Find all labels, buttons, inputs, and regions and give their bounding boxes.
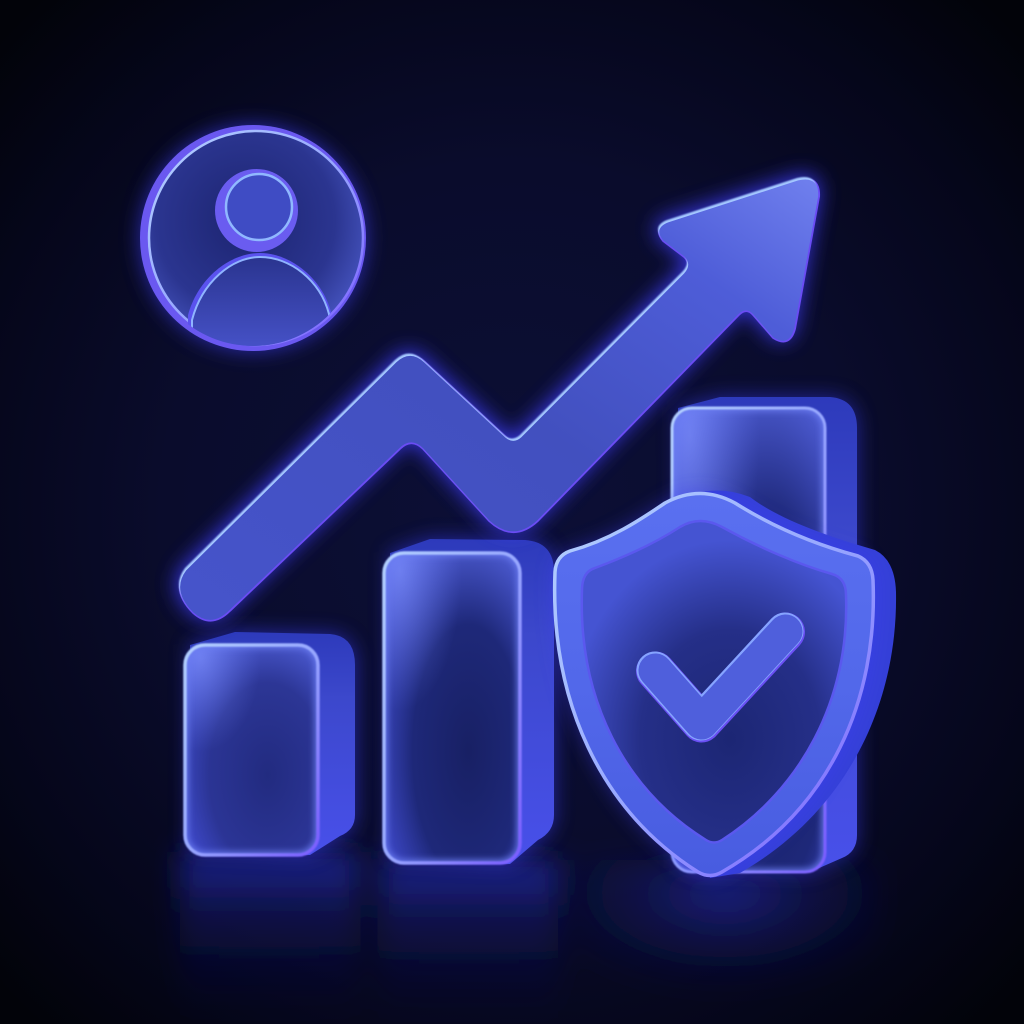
shield back xyxy=(690,490,896,878)
shield glow xyxy=(555,494,873,876)
profile icon xyxy=(140,125,366,351)
growth arrow xyxy=(179,177,819,620)
check mark xyxy=(655,631,786,723)
floor reflections xyxy=(180,852,880,1024)
security shield xyxy=(555,490,896,878)
bar chart xyxy=(185,397,857,872)
head xyxy=(215,169,298,252)
bar: short xyxy=(185,632,355,855)
shield front xyxy=(555,494,873,876)
shoulders xyxy=(188,253,331,350)
bar: medium xyxy=(384,539,554,864)
bar: tall xyxy=(672,397,857,872)
